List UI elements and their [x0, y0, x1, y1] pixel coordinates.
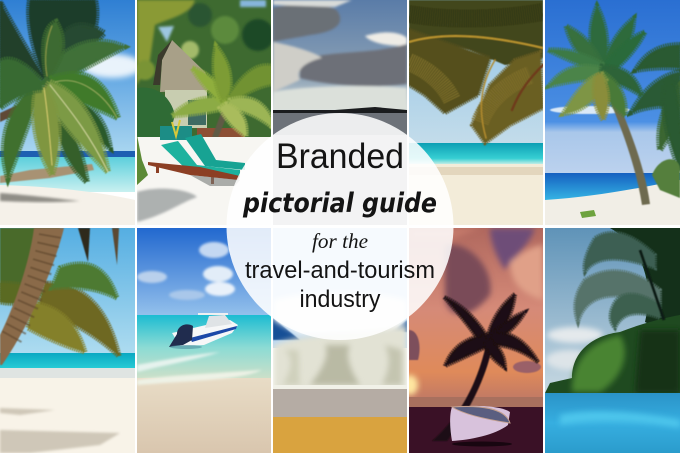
motorboat: [169, 314, 238, 349]
photo panel: resort hut with teal sun loungers: [135, 0, 274, 225]
photo panel: palm trunk over white beach: [0, 228, 135, 453]
photo panel: palm fronds over turquoise sea: [409, 0, 543, 225]
teal loungers: [148, 120, 245, 186]
trunk and crown of tall palm: [548, 6, 650, 205]
photo panel: tall palm on blue sky beach: [545, 0, 680, 225]
palm fronds: [575, 233, 664, 328]
title circle: [226, 113, 454, 340]
photo panel: cloudy sky over grey water: [273, 0, 407, 225]
thatched hut: [153, 40, 245, 137]
heading: pictorial guide: pictorial guide: [242, 188, 437, 219]
right palm: [632, 45, 680, 198]
fronds: [0, 228, 119, 356]
photo panel: motorboat on shallow turquoise water: [137, 228, 271, 453]
subheading: for the: for the: [312, 229, 368, 253]
palm tree: [0, 0, 124, 182]
subheading: industry: industry: [300, 286, 380, 313]
photo panel: infinity pool with tropical foliage: [545, 228, 680, 453]
white rowing boat: [450, 406, 512, 446]
subheading: travel-and-tourism: travel-and-tourism: [245, 257, 435, 284]
palm in foreground: [172, 46, 271, 138]
photo panel: leaning palm over turquoise beach: [0, 0, 142, 225]
big frond canopy: [409, 0, 543, 143]
photo panel: cloud bank and orange sand: [273, 228, 407, 453]
heading: Branded: Branded: [276, 137, 404, 176]
palm trunk: [0, 228, 64, 365]
dark foliage and bush: [545, 228, 680, 394]
photo panel: sunset palm with rowing boat: [402, 228, 543, 453]
palm silhouette: [432, 294, 538, 441]
